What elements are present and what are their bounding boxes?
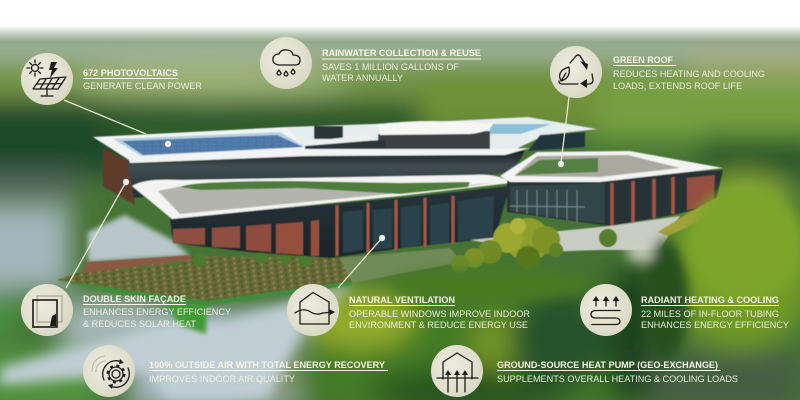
text: radiant heating: ENHANCES ENERGY EFFICIENCY <box>641 320 790 331</box>
icon: recycle leaf <box>550 46 602 98</box>
text: green roof: LOADS, EXTENDS ROOF LIFE <box>613 81 742 92</box>
right wing facade <box>507 170 723 226</box>
text: ground-source heat pump: SUPPLEMENTS OVERALL HEATING & COOLING LOADS <box>497 374 738 385</box>
left brick side <box>103 148 135 205</box>
round roof <box>378 121 493 135</box>
lawn patch <box>165 303 207 334</box>
text: double skin: ENHANCES ENERGY EFFICIENCY <box>83 307 232 318</box>
leader lines and dots <box>64 97 569 288</box>
text: natural ventilation: ENVIRONMENT & REDUCE ENERGY USE <box>349 320 528 331</box>
icon: rain cloud <box>260 37 312 89</box>
text: green roof: REDUCES HEATING AND COOLING <box>613 69 765 80</box>
road <box>0 284 355 400</box>
text: radiant heating <box>641 295 790 331</box>
left roof <box>93 127 307 160</box>
rear glass <box>528 132 585 151</box>
garden in front <box>57 248 462 303</box>
lower roof <box>132 175 511 219</box>
icon: double skin facade <box>21 284 73 336</box>
text: double skin <box>83 294 232 330</box>
text: natural ventilation: OPERABLE WINDOWS IMPROVE INDOOR <box>349 309 530 320</box>
icon: solar panel <box>21 53 73 105</box>
rooftop box <box>314 126 343 139</box>
text: green roof: GREEN ROOF <box>613 55 673 66</box>
text: photovoltaics: GENERATE CLEAN POWER <box>83 81 202 92</box>
text: rainwater: RAINWATER COLLECTION & REUSE <box>322 48 481 59</box>
green roof strip <box>180 181 470 194</box>
text: natural ventilation: NATURAL VENTILATION <box>349 295 455 306</box>
solar array <box>122 135 303 155</box>
white sky band <box>0 0 800 42</box>
text: ground-source heat pump: GROUND-SOURCE HEAT PUMP (GEO-EXCHANGE) <box>497 360 718 371</box>
back roofs <box>287 117 597 153</box>
upper facade <box>127 150 525 198</box>
window columns <box>337 196 453 256</box>
shrubs <box>119 252 312 270</box>
text: double skin: DOUBLE SKIN FAÇADE <box>83 294 186 305</box>
text: radiant heating: RADIANT HEATING & COOLING <box>641 295 779 306</box>
text: rainwater: WATER ANNUALLY <box>322 73 404 84</box>
icon: outside air gear <box>83 345 135 397</box>
roof membrane <box>158 182 497 214</box>
text: rainwater: SAVES 1 MILLION GALLONS OF <box>322 62 459 73</box>
text: photovoltaics <box>83 68 202 92</box>
icon: geo-exchange house <box>431 345 483 397</box>
sharp tree <box>451 196 720 273</box>
round glass <box>378 131 490 152</box>
text: double skin: & REDUCES SOLAR HEAT <box>83 319 196 330</box>
text: natural ventilation <box>349 295 530 331</box>
text: photovoltaics: 672 PHOTOVOLTAICS <box>83 68 178 79</box>
text: green roof <box>613 55 765 92</box>
text: outside air: IMPROVES INDOOR AIR QUALITY <box>149 374 296 385</box>
foreground tree blur <box>390 187 800 360</box>
icon: radiant heating <box>580 284 632 336</box>
building <box>57 117 723 306</box>
right wing roof <box>500 151 723 182</box>
second glass <box>305 140 385 154</box>
annex <box>88 215 190 262</box>
text: ground-source heat pump <box>497 360 738 385</box>
text: outside air: 100% OUTSIDE AIR WITH TOTAL ENERGY RECOVERY <box>149 360 386 371</box>
text: outside air <box>149 360 388 385</box>
band under roof <box>129 148 530 163</box>
text: rainwater <box>322 48 481 84</box>
skylight <box>490 124 552 134</box>
text: radiant heating: 22 MILES OF IN-FLOOR TUBING <box>641 309 779 320</box>
courtyard <box>470 216 680 252</box>
solar margin <box>113 132 305 156</box>
icon: natural ventilation <box>287 284 339 336</box>
second roof <box>305 135 378 146</box>
lower facade <box>170 186 510 258</box>
